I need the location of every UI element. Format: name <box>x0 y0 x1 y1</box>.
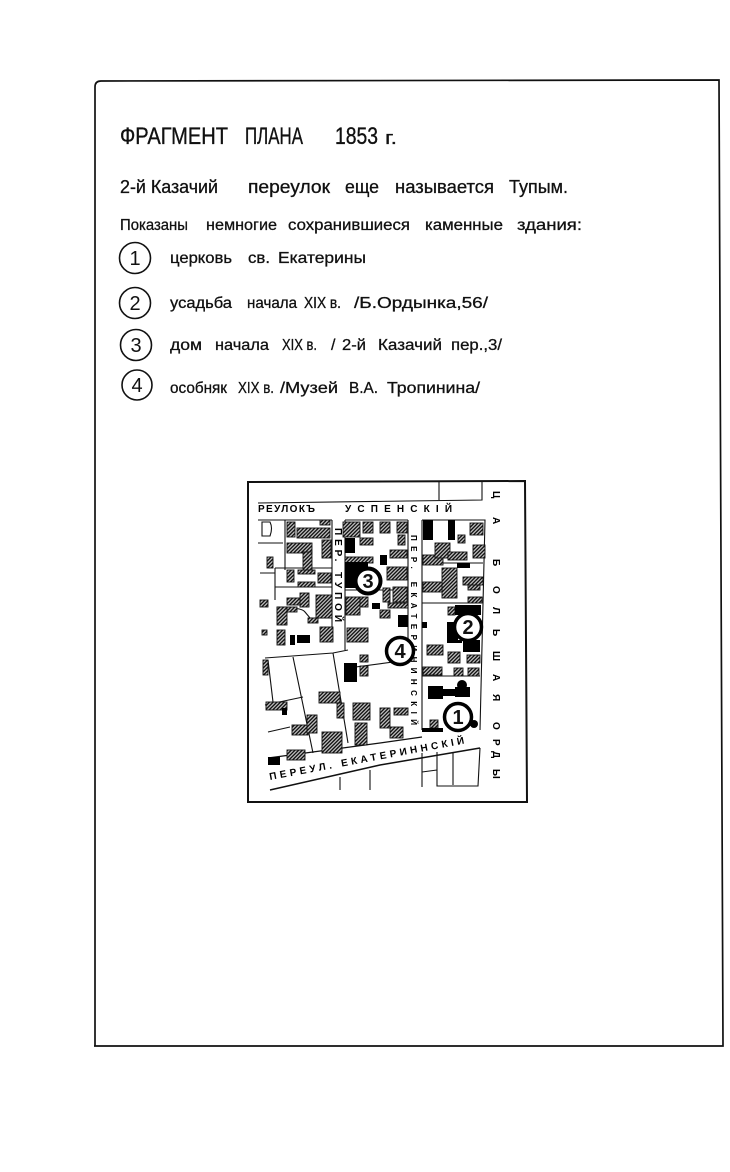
page frame <box>94 80 723 1046</box>
note: lane name: 2-й Казачий <box>120 177 218 197</box>
legend item 3: начала <box>215 337 269 354</box>
note: lane name: называется <box>395 177 494 197</box>
note: lane name: Тупым. <box>509 177 568 197</box>
legend item 1 <box>120 242 366 274</box>
map marker 1 <box>444 704 472 730</box>
title: ФРАГМЕНТ <box>120 123 228 150</box>
map marker 3 <box>356 568 380 594</box>
map labels: ПЕРЕУЛ. ЕКАТЕРИННСКІЙ <box>268 734 465 783</box>
legend item 1: церковь <box>170 250 232 267</box>
legend item 3: 2-й <box>342 337 366 354</box>
hatched buildings <box>260 520 485 760</box>
map marker 2 <box>454 614 482 640</box>
note: surviving buildings: каменные <box>425 217 503 234</box>
legend item 3: Казачий <box>378 337 442 354</box>
legend item 2: /Б.Ордынка,56/ <box>354 295 489 312</box>
map labels: ЦА БОЛЬШАЯ ОРДЫ <box>490 491 501 779</box>
title: ПЛАНА <box>245 123 303 150</box>
map marker 4: 4 <box>394 641 406 663</box>
legend item 1: св. <box>248 250 270 267</box>
note: lane name: переулок <box>248 177 330 197</box>
map frame <box>248 481 527 802</box>
note: surviving buildings: немногие <box>206 217 277 234</box>
note: surviving buildings: Показаны <box>120 217 188 234</box>
map labels <box>258 491 501 783</box>
map labels: ПЕР. ЕКАТЕРИНИНСКІЙ <box>409 535 418 725</box>
legend item 4: 4 <box>131 375 143 397</box>
note: lane name: еще <box>345 177 379 197</box>
legend item 4: В.А. <box>349 380 378 397</box>
note: surviving buildings: здания: <box>517 217 582 234</box>
note: lane name <box>120 177 568 197</box>
street and lot lines <box>258 482 485 790</box>
legend item 4 <box>122 370 481 400</box>
map labels: УСПЕНСКІЙ <box>345 502 452 515</box>
map marker 4 <box>386 638 414 664</box>
title: г. <box>385 128 397 148</box>
legend item 4: /Музей <box>280 380 338 397</box>
title <box>120 123 397 150</box>
legend item 2: усадьба <box>170 295 232 312</box>
legend item 3: пер.,3/ <box>451 337 503 354</box>
note: surviving buildings <box>120 217 582 234</box>
legend item 4: Тропинина/ <box>387 380 481 397</box>
legend item 4: особняк <box>170 380 228 397</box>
map labels: ПЕР. ТУПОЙ <box>332 528 345 622</box>
legend item 3 <box>120 330 503 360</box>
map labels: РЕУЛОКЪ <box>258 504 315 515</box>
legend item 1: Екатерины <box>278 250 366 267</box>
legend item 2: XIX в. <box>304 295 341 312</box>
legend item 2: начала <box>247 295 297 312</box>
map marker 2: 2 <box>462 617 474 639</box>
legend item 2: 2 <box>129 293 141 315</box>
legend item 3: дом <box>170 337 202 354</box>
note: surviving buildings: сохранившиеся <box>288 217 410 234</box>
legend item 3: 3 <box>130 335 142 357</box>
legend item 4: XIX в. <box>238 380 274 397</box>
icon: church of St. Catherine <box>428 680 478 728</box>
map: fragment of the 1853 plan <box>248 481 527 802</box>
legend item 2 <box>120 288 489 318</box>
black surviving buildings <box>268 520 481 765</box>
map marker 1: 1 <box>452 707 464 729</box>
legend item 1: 1 <box>129 248 141 270</box>
legend item 3: / <box>331 337 336 354</box>
legend item 3: XIX в. <box>282 337 317 354</box>
map marker 3: 3 <box>362 571 374 593</box>
title: 1853 <box>335 123 378 150</box>
